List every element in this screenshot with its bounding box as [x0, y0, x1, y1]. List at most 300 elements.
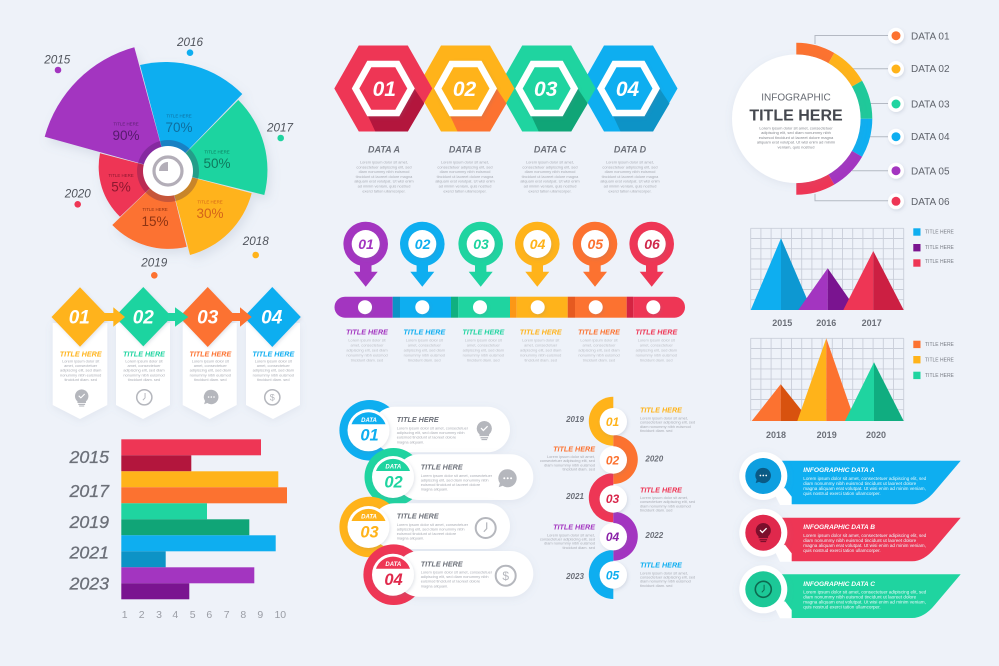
- pin captions: nonummy nibh euismod: [463, 352, 504, 358]
- banner B: [739, 509, 961, 562]
- hexagon captions: Lorem ipsum dolor sit amet,: [526, 160, 574, 164]
- diamond card text: nonummy nibh euismod: [123, 372, 165, 377]
- pie value labels: [108, 114, 231, 229]
- diamond card text: tincidunt diam. sed: [257, 377, 290, 382]
- hexagon captions: Lorem ipsum dolor sit amet,: [441, 160, 489, 164]
- pill 03: [339, 497, 510, 557]
- pie value labels: TITLE HERE: [142, 207, 168, 212]
- pin captions: adipiscing elit, sed diam: [520, 348, 561, 352]
- timeline captions: diam nonummy nibh euismod: [544, 541, 595, 546]
- timeline captions: Lorem ipsum dolor sit amet,: [547, 532, 595, 537]
- pin captions: adipiscing elit, sed diam: [346, 348, 388, 352]
- diamond 02: [115, 287, 172, 346]
- banner C: magna aliquam erat volutpat. Ut wisi enim ad minim veniam,: [803, 600, 926, 605]
- pill 03: Lorem ipsum dolor sit amet, consectetuer: [397, 522, 469, 527]
- pin captions: Lorem ipsum dolor sit: [638, 338, 676, 342]
- pie value labels: TITLE HERE: [113, 122, 139, 126]
- timeline captions: Lorem ipsum dolor sit amet,: [640, 416, 688, 420]
- timeline nodes: [600, 408, 627, 589]
- timeline captions: consectetuer adipiscing elit, sed: [540, 458, 595, 463]
- pill 03: DATA: [361, 514, 377, 520]
- horizontal bar chart: [68, 439, 287, 621]
- triangles: [752, 338, 904, 421]
- banner B: magna aliquam erat volutpat. Ut wisi enim ad minim veniam,: [803, 543, 926, 548]
- years: [766, 430, 886, 440]
- diamond card text: TITLE HERE: [252, 349, 294, 358]
- diamond card text: tincidunt diam. sed: [194, 377, 227, 382]
- hexagon captions: DATA B: [449, 144, 482, 154]
- hexagon captions: ad minim veniam, quis nostrud: [439, 184, 491, 188]
- pill 01: [339, 400, 510, 461]
- hexagon captions: ad minim veniam, quis nostrud: [358, 184, 410, 188]
- banner C: INFOGRAPHIC DATA C: [803, 581, 875, 588]
- pin captions: amet, consectetuer: [524, 342, 558, 348]
- timeline captions: consectetuer adipiscing elit, sed: [540, 536, 595, 542]
- hexagon captions: diam nonummy nibh euismod: [359, 169, 409, 174]
- pin captions: adipiscing elit, sed diam: [463, 348, 504, 352]
- pin 01: [343, 222, 388, 287]
- axis numbers: [122, 609, 286, 621]
- pin 04: [515, 222, 560, 287]
- pin 05: [573, 222, 617, 287]
- hexagon captions: aliquam erat volutpat. Ut wisi enim: [520, 179, 580, 184]
- axis numbers: 9: [257, 609, 263, 621]
- banner B: quis nostrud exerci tation ullamcorper.: [803, 548, 881, 553]
- pin captions: Lorem ipsum dolor sit: [348, 338, 387, 342]
- data legend: DATA 06: [911, 197, 950, 208]
- pin captions: nonummy nibh euismod: [404, 352, 445, 358]
- snake curve: [589, 397, 638, 599]
- pin captions: tincidunt diam. sed: [467, 358, 500, 362]
- axis numbers: 10: [274, 609, 286, 621]
- hexagon captions: exerci tation ullamcorper.: [362, 188, 406, 193]
- diamond card text: TITLE HERE: [123, 349, 165, 358]
- timeline captions: TITLE HERE: [640, 561, 682, 570]
- pin captions: TITLE HERE: [346, 328, 388, 336]
- year labels: 2019: [68, 512, 109, 532]
- banner C: diam nonummy nibh euismod tincidunt ut laoreet dolore: [803, 595, 917, 600]
- legend: TITLE HERE: [925, 245, 955, 251]
- pin 05: 05: [588, 236, 603, 252]
- hexagon 02: 02: [453, 78, 476, 101]
- white title circle: veniam, quis nostrud: [778, 144, 814, 149]
- pie year labels: 2017: [266, 122, 293, 134]
- pie year labels: [43, 36, 293, 279]
- pin captions: adipiscing elit, sed diam: [636, 348, 677, 352]
- pill 02: euismod tincidunt ut laoreet dolore: [421, 482, 480, 487]
- pin captions: adipiscing elit, sed diam: [404, 348, 445, 352]
- pie value labels: TITLE HERE: [108, 173, 134, 178]
- years: 2019: [817, 430, 837, 440]
- diamond card text: [60, 349, 294, 382]
- pin 02: [400, 222, 445, 287]
- white title circle: TITLE HERE: [749, 108, 843, 124]
- pill 04: TITLE HERE: [421, 559, 463, 568]
- timeline captions: diam nonummy nibh euismod: [640, 579, 691, 584]
- timeline years: 2022: [644, 531, 664, 540]
- hexagon 04: [580, 46, 678, 132]
- banner A: INFOGRAPHIC DATA A: [803, 467, 875, 474]
- hexagon captions: ad minim veniam, quis nostrud: [524, 184, 576, 188]
- data legend: DATA 04: [911, 132, 950, 143]
- diamond card text: tincidunt diam. sed: [64, 377, 97, 382]
- hexagon captions: [354, 144, 660, 193]
- pin captions: amet, consectetuer: [408, 342, 442, 348]
- legend: TITLE HERE: [925, 230, 955, 236]
- timeline captions: diam nonummy nibh euismod: [640, 503, 691, 508]
- hexagon captions: DATA D: [614, 144, 647, 154]
- timeline captions: Lorem ipsum dolor sit amet,: [547, 454, 595, 459]
- connector lines: [815, 36, 890, 201]
- pill 02: magna aliquam.: [421, 487, 448, 492]
- arrow 2: [168, 307, 188, 327]
- white title circle: Lorem ipsum dolor sit amet, consectetuer: [759, 126, 833, 130]
- axis numbers: 4: [172, 609, 178, 621]
- years: 2018: [766, 430, 786, 440]
- year labels: 2015: [68, 447, 109, 467]
- pill 02: Lorem ipsum dolor sit amet, consectetuer: [421, 473, 493, 478]
- hexagon captions: exerci tation ullamcorper.: [608, 188, 652, 193]
- pill 01: magna aliquam.: [397, 439, 424, 444]
- triangles: [751, 238, 904, 310]
- pin captions: Lorem ipsum dolor sit: [580, 338, 619, 342]
- pin captions: [346, 328, 677, 362]
- diamond 03: 03: [197, 308, 219, 328]
- years: 2020: [866, 430, 886, 440]
- diamond card text: nonummy nibh euismod: [190, 372, 231, 377]
- diamond card text: Lorem ipsum dolor sit: [62, 358, 100, 364]
- timeline captions: tincidunt diam. sed: [640, 508, 672, 513]
- diamond 03: [179, 287, 236, 347]
- pill 03: euismod tincidunt ut laoreet dolore: [397, 531, 456, 536]
- diamond 01: 01: [69, 308, 90, 328]
- hexagon captions: DATA A: [368, 144, 400, 154]
- banner B: Lorem ipsum dolor sit amet, consectetuer adipiscing elit, sed: [803, 533, 927, 538]
- pin captions: amet, consectetuer: [640, 342, 674, 348]
- pie value labels: 90%: [112, 128, 140, 143]
- pill 02: adipiscing elit, sed diam nonummy nibh: [421, 477, 489, 482]
- hexagon captions: Lorem ipsum dolor sit amet,: [360, 160, 408, 164]
- pill 04: [363, 544, 533, 605]
- diamond cards: [53, 323, 300, 419]
- axis numbers: 8: [240, 609, 246, 621]
- pill 04: Lorem ipsum dolor sit amet, consectetuer: [421, 570, 493, 574]
- pin captions: nonummy nibh euismod: [636, 352, 677, 358]
- timeline years: 2021: [565, 492, 584, 501]
- timeline captions: consectetuer adipiscing elit, sed: [640, 499, 695, 504]
- hexagon captions: DATA C: [534, 144, 567, 154]
- banner A: magna aliquam erat volutpat. Ut wisi enim ad minim veniam,: [803, 486, 926, 491]
- pill 04: $: [502, 569, 509, 583]
- diamond card text: adipiscing elit, sed diam: [190, 368, 231, 373]
- legend: TITLE HERE: [925, 373, 955, 379]
- banner C: [739, 565, 961, 618]
- pill 04: 04: [384, 571, 403, 589]
- pin captions: amet, consectetuer: [467, 342, 501, 348]
- pin captions: tincidunt diam. sed: [583, 358, 615, 362]
- pin captions: tincidunt diam. sed: [351, 358, 383, 362]
- axis numbers: 5: [190, 609, 196, 621]
- axis numbers: 6: [206, 609, 212, 621]
- pin 04: 04: [530, 236, 546, 252]
- timeline nodes: 01: [606, 415, 619, 429]
- diamond card text: Lorem ipsum dolor sit: [255, 358, 293, 364]
- legend: TITLE HERE: [925, 358, 955, 364]
- legend: TITLE HERE: [925, 342, 955, 348]
- pie year labels: 2015: [43, 54, 71, 66]
- diamond 02: 02: [133, 308, 154, 328]
- pin captions: TITLE HERE: [578, 328, 620, 336]
- hexagon captions: exerci tation ullamcorper.: [443, 188, 487, 193]
- pin captions: tincidunt diam. sed: [640, 358, 673, 362]
- pin captions: Lorem ipsum dolor sit: [522, 338, 560, 342]
- timeline nodes: 04: [606, 530, 619, 544]
- pill 03: 03: [360, 524, 379, 542]
- banners panel: [739, 452, 961, 618]
- diamond card text: amet, consectetuer: [194, 363, 228, 368]
- diamond card text: amet, consectetuer: [257, 363, 291, 368]
- icon: bulb: [75, 389, 88, 407]
- arrow 3: [232, 307, 252, 327]
- pin captions: Lorem ipsum dolor sit: [465, 338, 503, 342]
- diamond process panel: [52, 287, 301, 419]
- axis numbers: 2: [139, 609, 145, 621]
- diamond card text: nonummy nibh euismod: [253, 372, 294, 377]
- pill 01: DATA: [361, 418, 377, 424]
- banner A: [739, 452, 961, 505]
- pie value labels: 5%: [111, 180, 131, 194]
- diamond card text: Lorem ipsum dolor sit: [192, 358, 230, 364]
- timeline nodes: 03: [606, 492, 619, 506]
- timeline captions: consectetuer adipiscing elit, sed: [640, 420, 695, 425]
- pill 01: euismod tincidunt ut laoreet dolore: [397, 435, 456, 440]
- pie centre icon: [137, 140, 199, 202]
- hexagon captions: consectetuer adipiscing elit, sed: [522, 164, 578, 169]
- pin captions: nonummy nibh euismod: [520, 352, 561, 358]
- pin captions: Lorem ipsum dolor sit: [406, 338, 444, 342]
- pin captions: amet, consectetuer: [582, 342, 616, 348]
- hexagon captions: diam nonummy nibh euismod: [605, 169, 655, 174]
- hexagon 04: 04: [616, 78, 639, 101]
- pie value labels: TITLE HERE: [204, 150, 230, 154]
- diamond card text: tincidunt diam. sed: [128, 377, 160, 382]
- data legend: DATA 03: [911, 100, 950, 110]
- pin captions: TITLE HERE: [635, 328, 677, 336]
- pin captions: nonummy nibh euismod: [346, 352, 388, 358]
- icon: dollar: $: [270, 393, 275, 403]
- timeline captions: tincidunt diam. sed: [563, 545, 595, 550]
- white title circle: aliquam erat volutpat. Ut wisi enim ad minim: [757, 140, 836, 145]
- timeline captions: consectetuer adipiscing elit, sed: [640, 574, 695, 580]
- hexagon captions: diam nonummy nibh euismod: [525, 169, 575, 174]
- pie year labels: 2016: [176, 36, 203, 49]
- pin 03: [458, 222, 503, 287]
- hexagon 01: [334, 46, 432, 132]
- timeline nodes: 02: [606, 454, 619, 468]
- hexagon captions: diam nonummy nibh euismod: [440, 169, 490, 174]
- data legend: [888, 28, 950, 209]
- stacked pills panel: [339, 400, 533, 605]
- pie value labels: TITLE HERE: [166, 114, 192, 118]
- segmented bar: [334, 297, 685, 318]
- years: 2017: [862, 318, 882, 328]
- pill 03: TITLE HERE: [397, 512, 439, 521]
- pill 04: euismod tincidunt ut laoreet dolore: [421, 579, 480, 584]
- legend: [913, 228, 955, 267]
- pie value labels: 50%: [203, 156, 231, 171]
- timeline years: [565, 415, 664, 581]
- timeline captions: TITLE HERE: [640, 485, 682, 494]
- diamond card text: TITLE HERE: [60, 349, 102, 358]
- timeline nodes: 05: [606, 568, 619, 582]
- hexagon captions: tincidunt ut laoreet dolore magna: [522, 174, 579, 179]
- pin 01: 01: [358, 236, 374, 252]
- pie value labels: 70%: [165, 120, 193, 135]
- grid: [751, 338, 904, 421]
- data legend: DATA 05: [911, 166, 950, 177]
- pin 06: 06: [644, 236, 660, 252]
- years: 2016: [816, 318, 836, 328]
- icon: clock: [137, 390, 152, 405]
- icon: chat: [204, 390, 218, 404]
- hexagon 03: 03: [534, 78, 558, 101]
- years: 2015: [772, 318, 792, 328]
- pin captions: adipiscing elit, sed diam: [578, 348, 620, 352]
- pill 04: adipiscing elit, sed diam nonummy nibh: [421, 574, 489, 579]
- grid: [751, 228, 904, 310]
- timeline captions: TITLE HERE: [553, 523, 595, 532]
- hexagon captions: aliquam erat volutpat. Ut wisi enim: [354, 179, 414, 184]
- hexagon steps panel: [334, 46, 678, 193]
- timeline captions: diam nonummy nibh euismod: [640, 424, 691, 429]
- axis numbers: 3: [156, 609, 162, 621]
- pie year labels: 2019: [140, 256, 168, 270]
- year labels: 2021: [68, 542, 109, 562]
- diamond card text: adipiscing elit, sed diam: [253, 368, 294, 373]
- arc segments: [796, 43, 872, 195]
- legend: TITLE HERE: [925, 259, 955, 265]
- pin captions: TITLE HERE: [403, 328, 445, 336]
- years: [772, 318, 882, 328]
- pin 02: 02: [415, 236, 431, 252]
- pin captions: amet, consectetuer: [350, 342, 384, 348]
- pin 06: [629, 222, 674, 287]
- pie value labels: 30%: [196, 206, 224, 221]
- hexagon 01: 01: [373, 78, 396, 101]
- diamond card text: adipiscing elit, sed diam: [123, 368, 165, 373]
- white title circle: euismod tincidunt ut laoreet dolore magna: [759, 135, 834, 140]
- timeline captions: TITLE HERE: [640, 406, 682, 414]
- pin captions: tincidunt diam. sed: [408, 358, 441, 362]
- diamond card text: adipiscing elit, sed diam: [60, 368, 101, 373]
- hexagon captions: consectetuer adipiscing elit, sed: [356, 164, 412, 169]
- pie year labels: 2020: [64, 188, 91, 200]
- pin captions: TITLE HERE: [462, 328, 504, 336]
- hexagon captions: ad minim veniam, quis nostrud: [604, 184, 656, 188]
- banner A: quis nostrud exerci tation ullamcorper.: [803, 491, 881, 496]
- timeline captions: Lorem ipsum dolor sit amet,: [640, 570, 688, 575]
- hexagon captions: aliquam erat volutpat. Ut wisi enim: [435, 179, 495, 184]
- white title circle: [732, 54, 861, 183]
- triangle chart 2015-2017: [751, 228, 955, 328]
- banner A: Lorem ipsum dolor sit amet, consectetuer adipiscing elit, sed: [803, 476, 927, 481]
- hexagon captions: Lorem ipsum dolor sit amet,: [606, 160, 654, 164]
- pill 02: DATA: [385, 464, 401, 470]
- banner B: diam nonummy nibh euismod tincidunt ut laoreet dolore: [803, 538, 917, 543]
- hexagon captions: consectetuer adipiscing elit, sed: [437, 164, 493, 169]
- pill 02: TITLE HERE: [421, 463, 463, 472]
- bars: [121, 439, 287, 599]
- timeline captions: tincidunt diam. sed: [563, 467, 595, 472]
- year labels: 2023: [68, 574, 109, 594]
- pie year labels: 2018: [242, 235, 269, 248]
- pins and timeline bar panel: [334, 222, 685, 362]
- triangle chart 2018-2020: [751, 338, 955, 440]
- hexagon captions: consectetuer adipiscing elit, sed: [602, 164, 658, 169]
- hexagon captions: aliquam erat volutpat. Ut wisi enim: [600, 179, 660, 184]
- diamond 04: [244, 287, 301, 347]
- banner C: Lorem ipsum dolor sit amet, consectetuer adipiscing elit, sed: [803, 590, 927, 595]
- hexagon captions: tincidunt ut laoreet dolore magna: [437, 174, 494, 179]
- pie value labels: TITLE HERE: [197, 200, 223, 204]
- pin captions: tincidunt diam. sed: [524, 358, 557, 362]
- timeline years: 2019: [565, 415, 584, 424]
- year labels: [68, 447, 110, 594]
- white title circle: adipiscing elit, sed diam nonummy nibh: [761, 130, 831, 135]
- year labels: 2017: [68, 481, 110, 501]
- axis numbers: 7: [224, 609, 230, 621]
- timeline years: 2023: [565, 572, 584, 581]
- diamond card text: TITLE HERE: [189, 349, 231, 358]
- hexagon 03: [498, 46, 596, 132]
- timeline captions: diam nonummy nibh euismod: [544, 462, 595, 467]
- pill 03: magna aliquam.: [397, 536, 424, 541]
- pie value labels: 15%: [141, 214, 169, 229]
- pill 01: TITLE HERE: [397, 415, 439, 424]
- banner C: quis nostrud exerci tation ullamcorper.: [803, 605, 881, 610]
- pill 01: 01: [360, 426, 379, 444]
- timeline captions: Lorem ipsum dolor sit amet,: [640, 495, 688, 500]
- timeline captions: TITLE HERE: [553, 444, 595, 453]
- pin captions: TITLE HERE: [520, 328, 562, 336]
- timeline years: 2020: [644, 454, 664, 464]
- pill 02: 02: [384, 474, 403, 492]
- axis numbers: 1: [122, 609, 128, 621]
- pill 02: [364, 448, 533, 506]
- pill 01: adipiscing elit, sed diam nonummy nibh: [397, 430, 465, 435]
- white title circle: INFOGRAPHIC: [761, 92, 831, 104]
- hexagon captions: tincidunt ut laoreet dolore magna: [602, 174, 659, 179]
- diamond 01: [52, 287, 108, 347]
- timeline captions: tincidunt diam. sed: [640, 428, 672, 433]
- pie sectors: [45, 47, 267, 255]
- diamond card text: amet, consectetuer: [127, 363, 161, 368]
- timeline captions: [540, 406, 695, 588]
- diamond card text: nonummy nibh euismod: [60, 372, 101, 377]
- hexagon 02: [416, 46, 514, 132]
- pie chart panel: [43, 36, 293, 279]
- diamond 04: 04: [261, 308, 283, 328]
- snake timeline panel: [540, 397, 695, 599]
- pin 03: 03: [473, 236, 489, 252]
- data legend: DATA 01: [911, 32, 950, 42]
- pill 01: Lorem ipsum dolor sit amet, consectetuer: [397, 426, 469, 430]
- icon: dollar: [265, 390, 280, 405]
- legend: [913, 341, 955, 379]
- pill 03: adipiscing elit, sed diam nonummy nibh: [397, 526, 465, 531]
- banner A: diam nonummy nibh euismod tincidunt ut laoreet dolore: [803, 481, 917, 486]
- arrow 1: [104, 307, 125, 327]
